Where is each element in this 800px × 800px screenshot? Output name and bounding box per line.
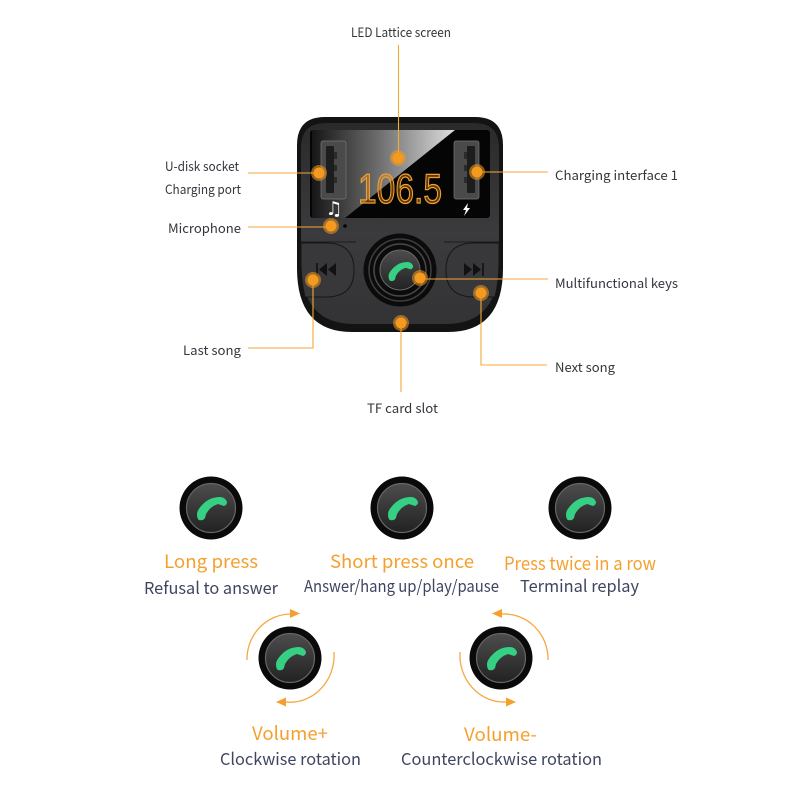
heading: Press twice in a row: Press twice in a row <box>504 550 656 576</box>
icon: music note: ♫ <box>325 198 343 220</box>
left USB port <box>321 141 346 199</box>
screen glare <box>312 130 455 218</box>
right USB port <box>454 141 479 199</box>
text: Answer/hang up/play/pause: Answer/hang up/play/pause <box>304 573 499 597</box>
icon: button, long press <box>180 476 242 540</box>
label: U-disk socket: U-disk socket <box>165 156 239 175</box>
frequency display: 106.5 <box>358 165 442 212</box>
text: Refusal to answer: Refusal to answer <box>144 575 279 599</box>
heading: Volume+: Volume+ <box>252 720 328 746</box>
label: Last song: Last song <box>183 340 242 359</box>
heading: Long press: Long press <box>164 548 258 574</box>
icon: phone handset <box>389 262 413 281</box>
label: LED Lattice screen: LED Lattice screen <box>351 22 451 41</box>
product: FM transmitter device <box>297 117 503 332</box>
device body <box>297 117 503 332</box>
next button <box>446 243 499 297</box>
icon: button, volume down <box>470 626 532 690</box>
label: Multifunctional keys: Multifunctional keys <box>555 273 678 292</box>
previous button <box>301 243 354 297</box>
icon: lightning bolt <box>463 203 470 216</box>
label: TF card slot: TF card slot <box>367 398 438 417</box>
label: Microphone: Microphone <box>168 218 241 237</box>
device face <box>301 123 499 324</box>
text: Clockwise rotation: Clockwise rotation <box>220 746 361 770</box>
microphone hole <box>343 224 347 228</box>
callout dots <box>305 150 489 331</box>
icon: button, volume up <box>258 626 322 690</box>
label: Charging port: Charging port <box>165 179 241 198</box>
heading: Short press once: Short press once <box>330 548 474 574</box>
text: Terminal replay: Terminal replay <box>520 573 639 597</box>
label: Next song: Next song <box>555 357 616 376</box>
text: Counterclockwise rotation: Counterclockwise rotation <box>401 746 602 770</box>
arrows: clockwise rotation <box>247 609 334 706</box>
label: Charging interface 1: Charging interface 1 <box>555 165 678 184</box>
callout lines <box>248 45 548 392</box>
seam line <box>301 241 499 243</box>
icon: button, press twice <box>548 476 612 540</box>
multifunction knob <box>364 234 436 306</box>
heading: Volume-: Volume- <box>464 721 537 747</box>
arrows: counterclockwise rotation <box>460 609 548 706</box>
screen panel <box>310 130 490 218</box>
icon: button, short press <box>370 476 434 540</box>
